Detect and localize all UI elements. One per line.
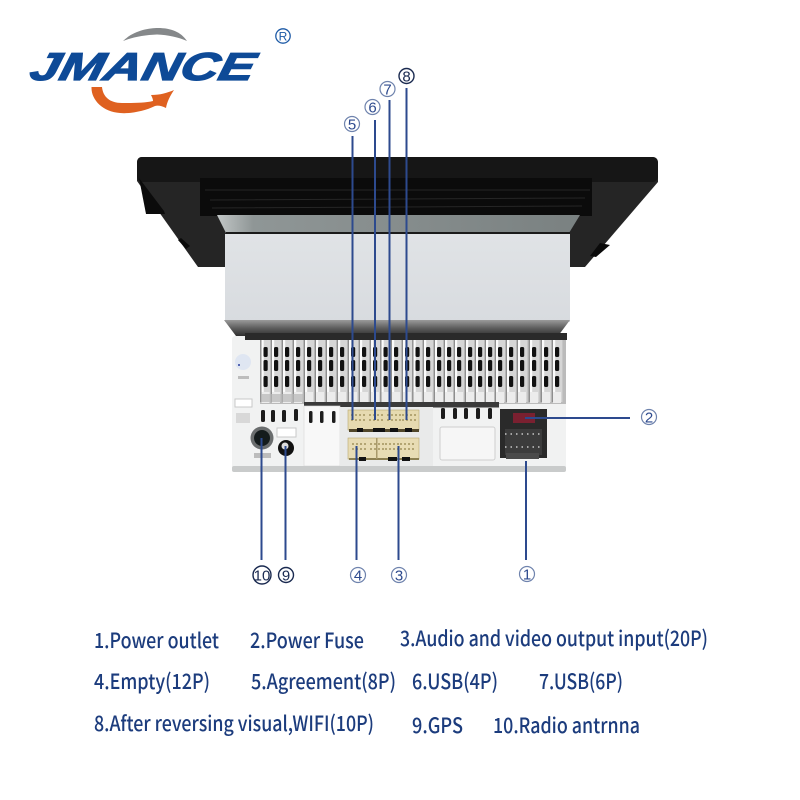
- leader lines: [262, 88, 630, 560]
- logo wordmark: JMANCE: [26, 44, 262, 88]
- legend text: 2.Power Fuse: [250, 625, 364, 655]
- legend text: 6.USB(4P): [412, 666, 498, 696]
- marker 8: 8: [402, 68, 411, 86]
- logo: JMANCE: [26, 28, 290, 113]
- marker 1: [520, 566, 534, 584]
- legend text: 9.GPS: [412, 710, 463, 740]
- marker 6: 6: [368, 100, 377, 116]
- GPS socket: [277, 428, 296, 456]
- legend text: 1.Power outlet: [94, 625, 219, 655]
- power connector: [500, 409, 547, 459]
- fuse: [513, 413, 535, 423]
- legend text: 7.USB(6P): [539, 666, 623, 696]
- legend text: 4.Empty(12P): [94, 666, 210, 696]
- silver top cover: [225, 234, 570, 322]
- main body plate: [232, 336, 566, 472]
- marker 2: 2: [645, 410, 653, 426]
- marker 8: [399, 68, 414, 86]
- marker 1: 1: [523, 566, 531, 584]
- marker 4: [350, 568, 366, 584]
- logo orange arrow: [91, 87, 174, 113]
- metal plate: [217, 215, 580, 233]
- rear bevel band: [224, 320, 570, 336]
- marker 4: 4: [354, 568, 362, 584]
- bottom edge: [232, 466, 566, 472]
- marker 2: [642, 410, 656, 426]
- marker 9: [278, 568, 294, 584]
- product photo: car radio rear view: [137, 157, 658, 472]
- center blank module: [304, 406, 340, 466]
- connectors 5 6 7 8: [348, 410, 419, 432]
- legend text: 10.Radio antrnna: [493, 710, 640, 740]
- legend text: 5.Agreement(8P): [251, 666, 396, 696]
- marker 7: [380, 82, 395, 98]
- logo swoosh: [123, 28, 187, 41]
- legend text: 3.Audio and video output input(20P): [400, 623, 708, 653]
- marker 9: 9: [282, 568, 290, 584]
- number markers: [253, 68, 656, 584]
- screen housing: [137, 157, 658, 267]
- marker 3: 3: [395, 568, 403, 584]
- registered mark: R: [279, 30, 288, 44]
- left label sticker: [235, 354, 252, 423]
- lower vent slots: [261, 408, 492, 422]
- connectors 4 3: [348, 438, 419, 461]
- legend text: [94, 623, 708, 740]
- marker 7: 7: [383, 82, 392, 98]
- marker 5: 5: [348, 116, 356, 134]
- marker 5: [344, 116, 360, 134]
- marker 6: [365, 100, 380, 116]
- antenna socket: [250, 426, 274, 458]
- legend text: 8.After reversing visual,WIFI(10P): [94, 708, 374, 738]
- heatsink fins: [245, 333, 567, 408]
- marker 10: 10: [254, 568, 270, 584]
- marker 3: [392, 568, 406, 584]
- connector bay: [340, 407, 433, 467]
- registered mark: [276, 29, 290, 44]
- blank label: [440, 427, 495, 460]
